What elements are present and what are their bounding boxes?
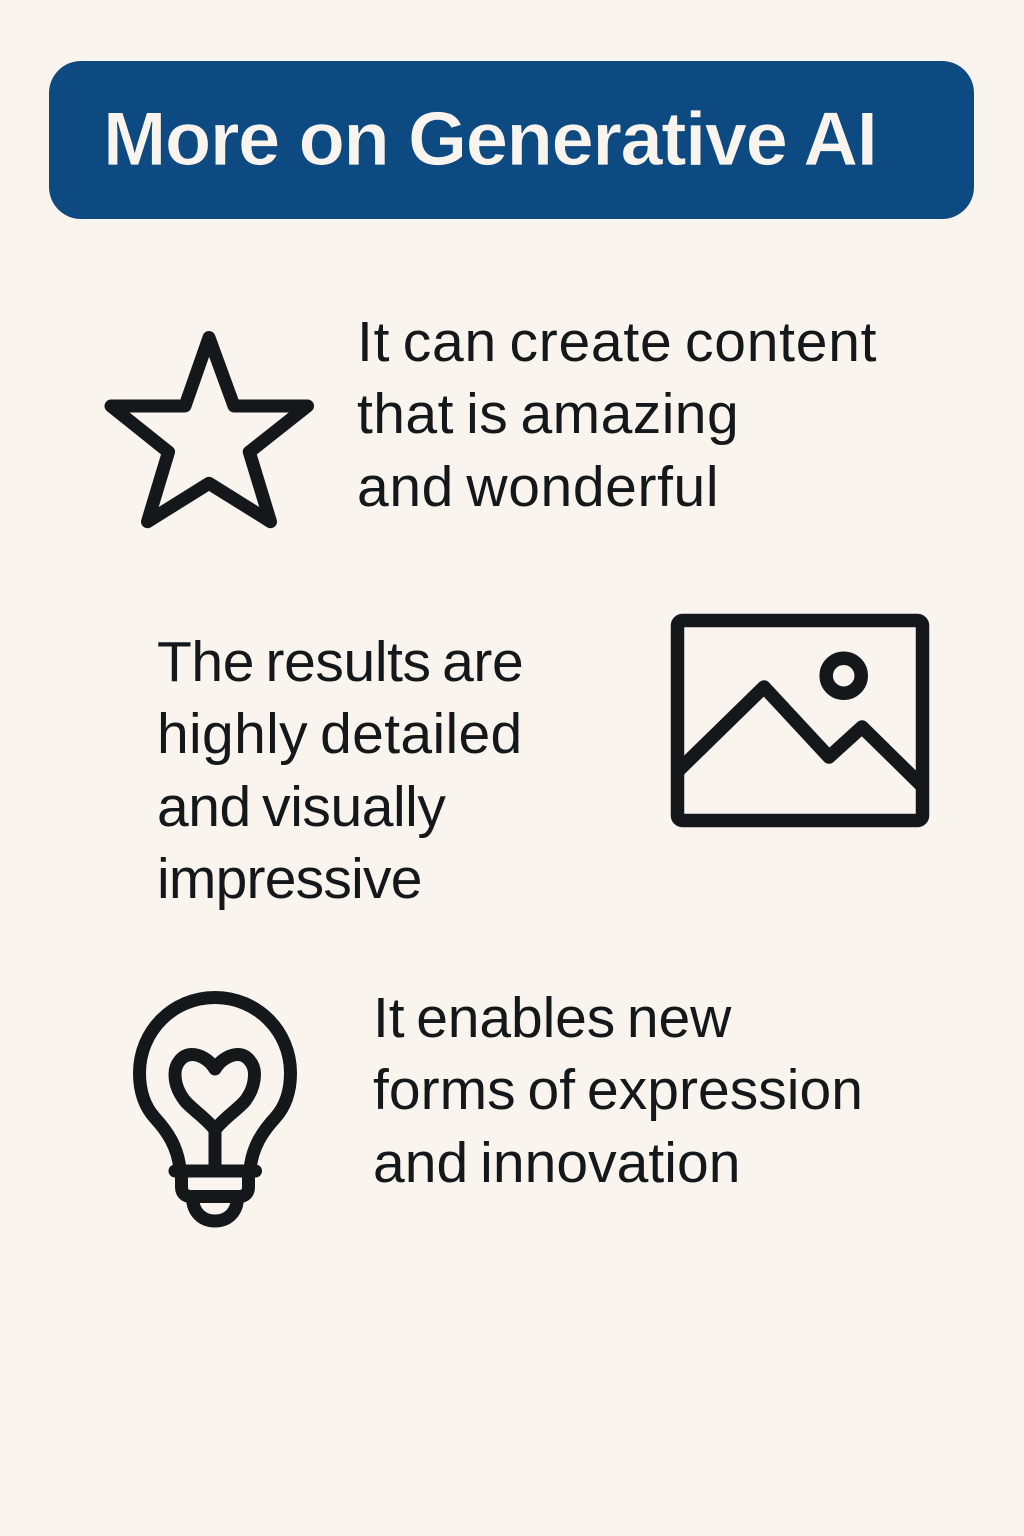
text block: expression: forms of expression	[373, 1058, 863, 1122]
icon: lightbulb with heart	[140, 998, 290, 1221]
text block: expression	[373, 986, 863, 1195]
text block: results	[157, 630, 523, 911]
icon: star	[111, 338, 308, 522]
title: More on Generative AI	[103, 97, 876, 182]
text block: results: highly detailed	[157, 702, 523, 766]
text block: content	[357, 310, 877, 519]
text block: expression: It enables new	[373, 986, 731, 1050]
text block: results: and visually	[157, 775, 445, 839]
icon: image	[678, 620, 922, 820]
text block: content: and wonderful	[357, 455, 719, 519]
text block: content: It can create content	[357, 310, 877, 374]
text block: content: that is amazing	[357, 382, 739, 446]
text block: expression: and innovation	[373, 1131, 741, 1195]
header banner	[49, 61, 974, 219]
text block: results: The results are	[157, 630, 523, 694]
text block: results: impressive	[157, 847, 422, 911]
